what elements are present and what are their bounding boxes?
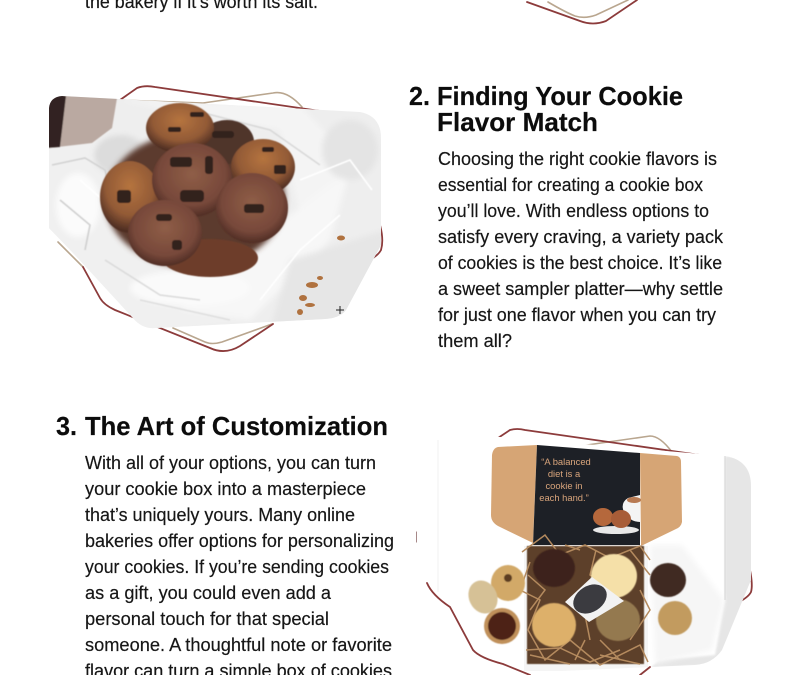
heading: section 3: The Art of Customization: [85, 411, 388, 441]
outline: behind cookie photo: [58, 86, 382, 351]
heading: section 2: 2.: [409, 81, 430, 111]
text block: section 3 body: as a gift, you could even add a: [85, 583, 332, 603]
text block: section 2 body: them all?: [438, 331, 512, 351]
text block: section 2 body: [438, 149, 724, 351]
sticker: [565, 577, 624, 622]
teacup and plate: [593, 495, 641, 534]
decorative outline: section 1 image bottom: [527, 0, 637, 24]
quote on panel: each hand.”: [539, 492, 589, 503]
text block: section 2 body: essential for creating a cookie box: [438, 175, 703, 195]
text block: section 2 body: satisfy every craving, a variety pack: [438, 227, 724, 247]
heading: section 3: 3.: [56, 411, 77, 441]
text block: section 2 body: for just one flavor when you can try: [438, 305, 716, 325]
text block: section 3 body: that’s uniquely yours. Many online: [85, 505, 355, 525]
table corner: [45, 92, 117, 148]
heading: section 2: [409, 81, 683, 137]
crumbs: [297, 236, 345, 315]
right side shade: [652, 456, 751, 667]
text block: section 3 body: With all of your options, you can turn: [85, 453, 376, 473]
cookie shadow: [105, 132, 285, 268]
text block: section 3 body: your cookie box into a masterpiece: [85, 479, 366, 499]
outline: behind box photo: [417, 429, 752, 604]
quote on panel: cookie in: [545, 480, 583, 491]
text block: section 3 body: [85, 453, 394, 675]
box interior with shredded paper: [524, 546, 648, 671]
cookies outside box, right: [650, 563, 692, 635]
parchment and cookies, clipped: [49, 96, 381, 328]
photo: chocolate cookies on parchment: [40, 86, 390, 351]
heading: section 2: Flavor Match: [437, 107, 598, 137]
chocolate chunks: [117, 112, 286, 250]
text block: section 2 body: Choosing the right cookie flavors is: [438, 149, 717, 169]
text block: section 3 body: bakeries offer options for personalizing: [85, 531, 394, 551]
text block: section 2 body: a sweet sampler platter—why settle: [438, 279, 723, 299]
quote on panel: [540, 458, 590, 501]
quote on panel: “A balanced: [541, 456, 591, 467]
quote on panel: diet is a: [548, 468, 581, 479]
outline: over box photo, lower edge: [427, 583, 650, 675]
cookies: [100, 103, 295, 277]
paper creases: [52, 112, 372, 320]
cookies outside box, left: [463, 565, 525, 644]
box lid flaps: [491, 445, 537, 543]
text block: section 2 body: you’ll love. With endless options to: [438, 201, 709, 221]
text block: section 3 body: your cookies. If you’re sending cookies: [85, 557, 389, 577]
cookies inside box: [532, 549, 640, 647]
text block: section 2 body: of cookies is the best choice. It’s like: [438, 253, 722, 273]
heading: section 2: Finding Your Cookie: [437, 81, 683, 111]
text block: section 3 body: someone. A thoughtful note or favorite: [85, 635, 392, 655]
dark panel: [533, 445, 640, 545]
text block: section 3 body: personal touch for that special: [85, 609, 329, 629]
photo: cookie gift box: [410, 429, 760, 675]
